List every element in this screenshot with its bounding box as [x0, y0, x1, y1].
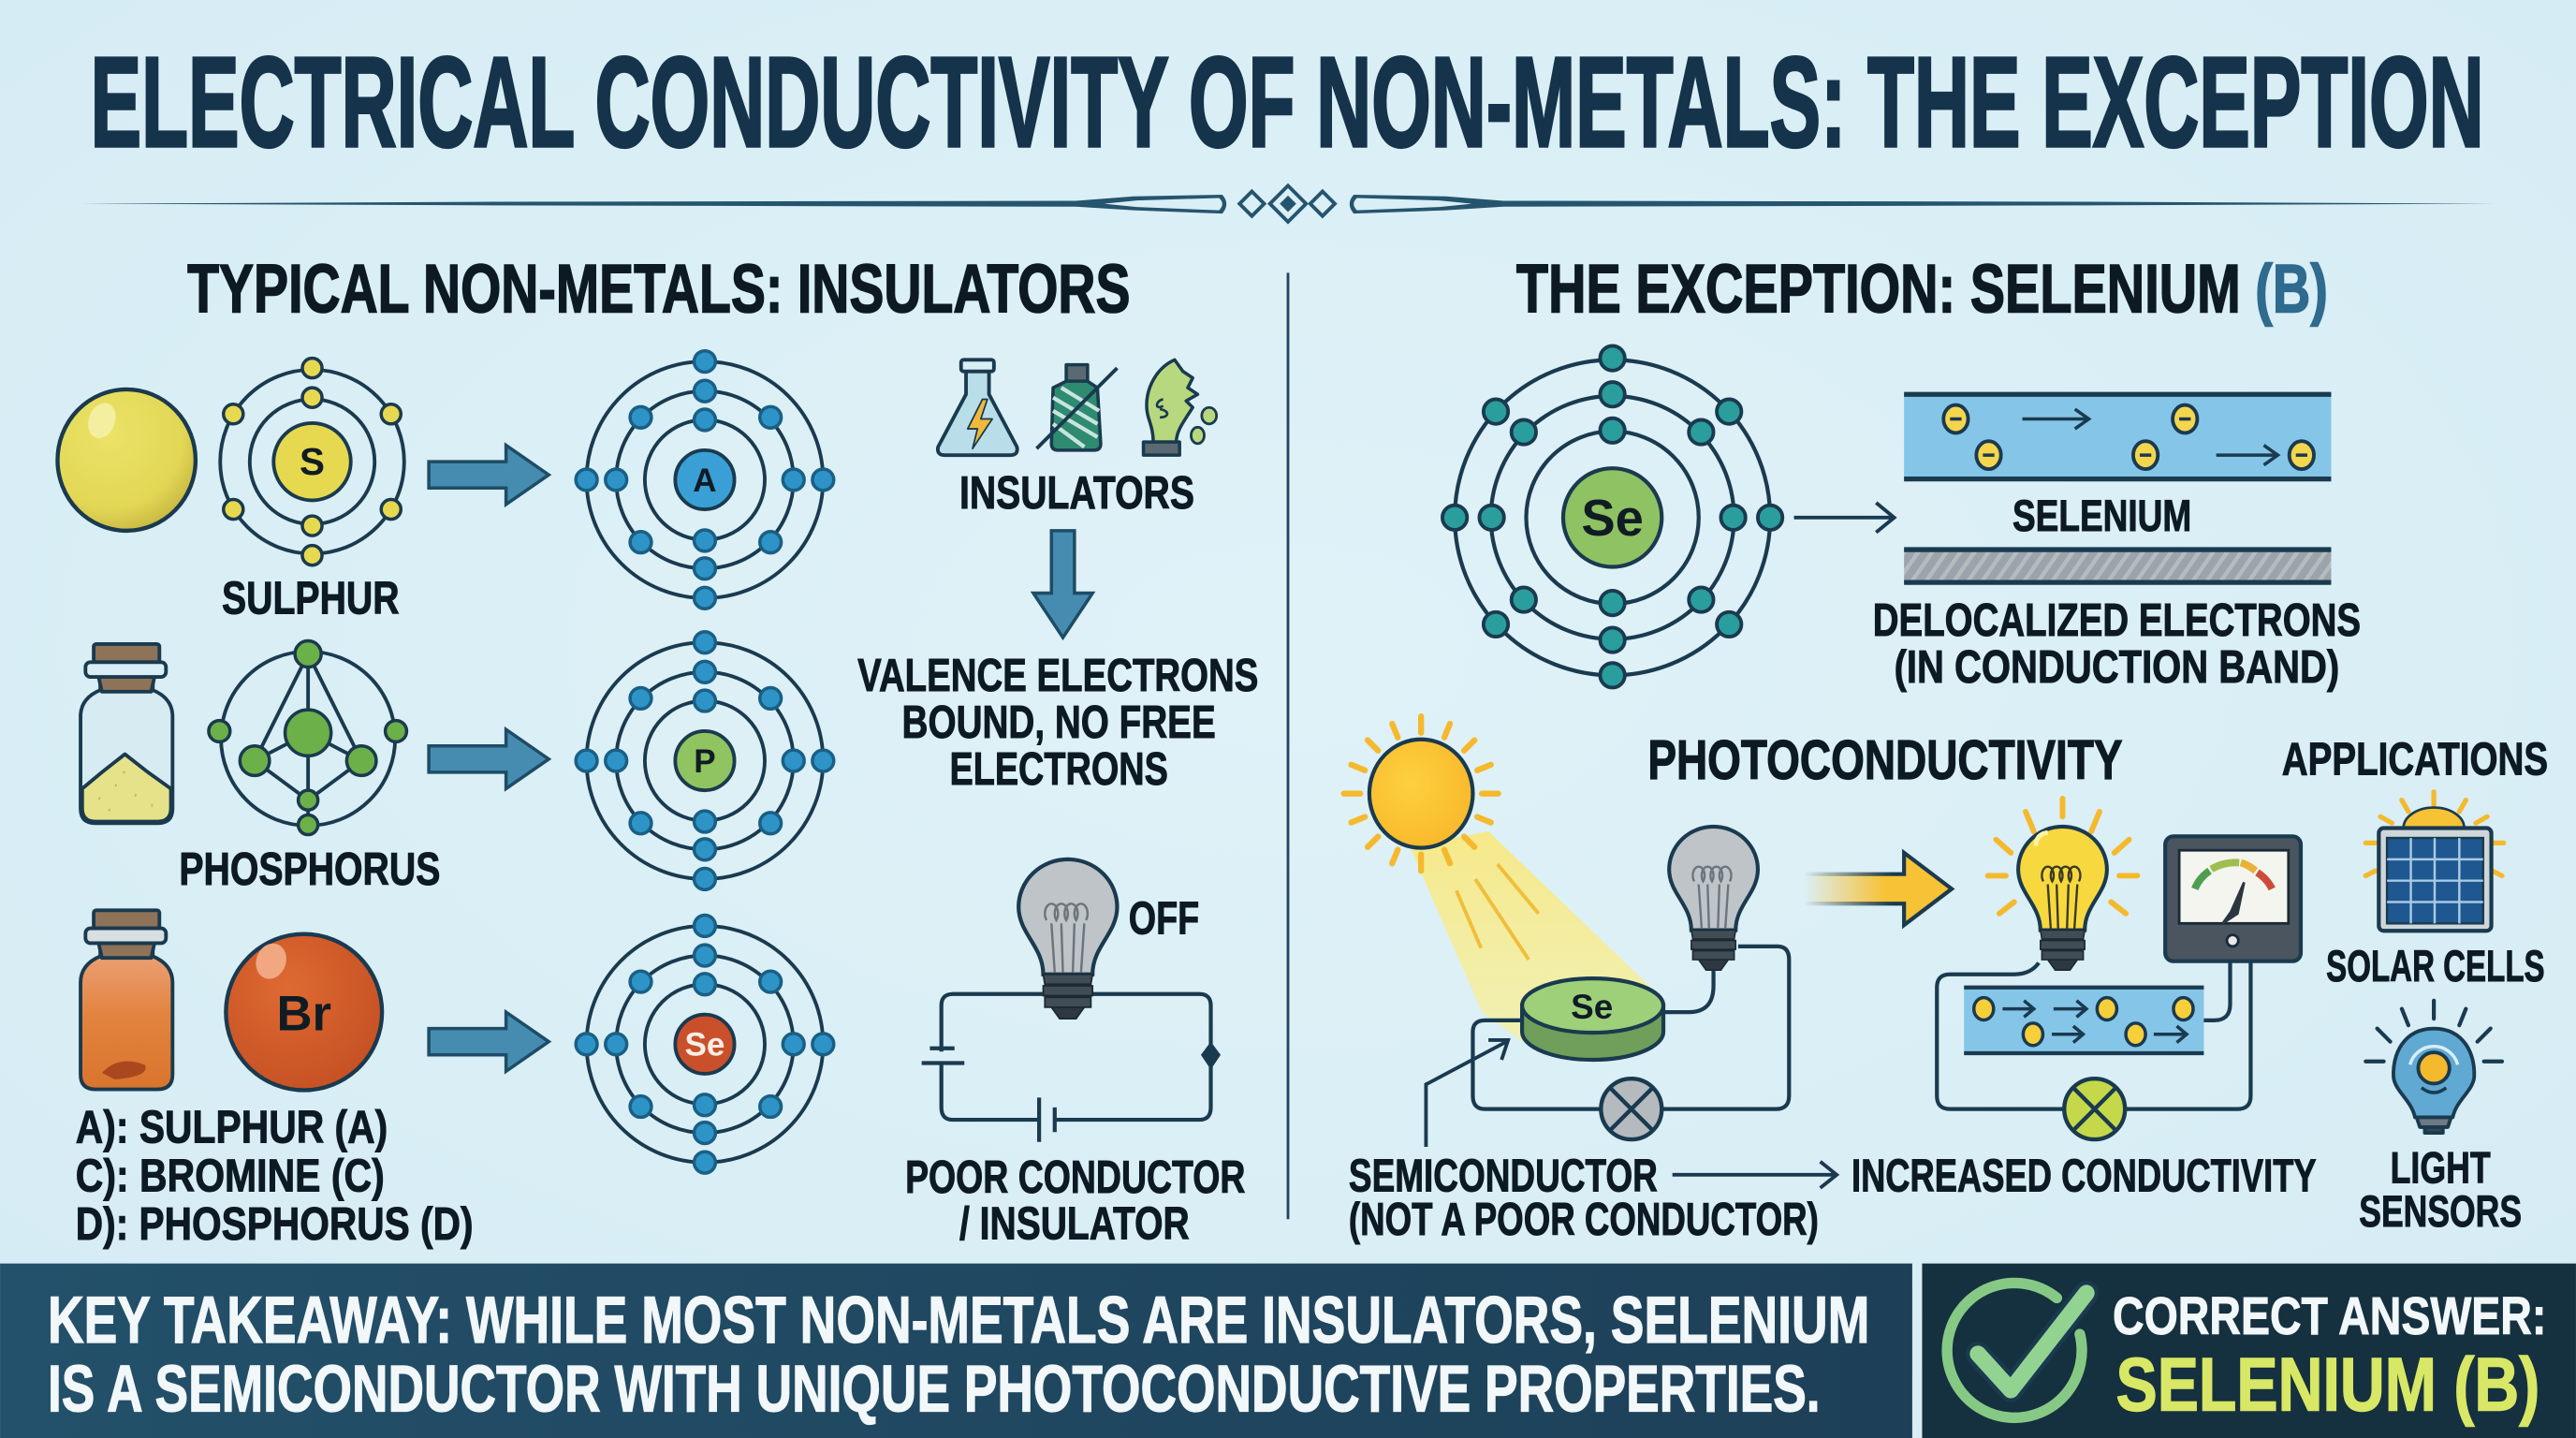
text: valence electrons: ELECTRONS: [949, 744, 1168, 795]
list: answer options: A): SULPHUR (A): [76, 1103, 388, 1153]
label: off: OFF: [1129, 894, 1199, 945]
arrow: phosphorus to atom P: [429, 729, 549, 788]
list: answer options: [76, 1103, 474, 1250]
icon: broken bulb: [1144, 360, 1217, 455]
list: answer options: C): BROMINE (C): [76, 1151, 385, 1201]
label: insulators: INSULATORS: [959, 468, 1194, 519]
atom: P: [576, 632, 834, 889]
icon: sulphur sphere: [57, 389, 196, 531]
text: takeaway: KEY TAKEAWAY: WHILE MOST NON-METALS ARE INSULATORS, SELENIUM: [48, 1283, 1869, 1357]
diagram: conduction band: [1904, 394, 2331, 479]
icon: grey lamp: [1601, 1078, 1661, 1139]
arrow: yellow transition: [1804, 853, 1952, 925]
circuit: open circuit with off bulb: [922, 859, 1221, 1142]
text: valence electrons: BOUND, NO FREE: [902, 697, 1216, 748]
icon: bromine sphere: Br: [276, 986, 331, 1041]
arrow: bromine to atom Se: [429, 1012, 549, 1071]
panel: correct answer: [1922, 1264, 2576, 1438]
light beam: [1410, 831, 1653, 1045]
label: poor conductor: / INSULATOR: [959, 1198, 1190, 1249]
text: takeaway: IS A SEMICONDUCTOR WITH UNIQUE PHOTOCONDUCTIVE PROPERTIES.: [48, 1352, 1821, 1426]
text: semiconductor: [1349, 1151, 1819, 1245]
icon: phosphorus vial: [80, 644, 172, 823]
label: poor conductor: [905, 1152, 1245, 1249]
heading: exception: THE EXCEPTION: SELENIUM (B): [1516, 249, 2328, 327]
arrow: sulphur to atom A: [429, 446, 549, 505]
panel: the exception selenium: [1344, 249, 2548, 1245]
icon: sulphur atom: S: [300, 440, 325, 483]
heading: typical non-metals: TYPICAL NON-METALS: INSULATORS: [187, 249, 1131, 327]
label: light sensors: SENSORS: [2359, 1187, 2522, 1237]
panel: typical non-metals: [57, 249, 1258, 1250]
icon: meter: [2165, 836, 2301, 961]
label: phosphorus: PHOSPHORUS: [179, 844, 440, 895]
icon: sun: [1344, 716, 1499, 871]
list: answer options: D): PHOSPHORUS (D): [76, 1199, 474, 1250]
label: poor conductor: POOR CONDUCTOR: [905, 1152, 1245, 1203]
icon: light sensor: [2365, 1001, 2502, 1133]
icon: flask: [938, 360, 1017, 455]
label: light sensors: LIGHT: [2391, 1144, 2491, 1194]
label: light sensors: [2359, 1144, 2522, 1237]
atom: selenium: [1442, 345, 1782, 687]
text: valence electrons: VALENCE ELECTRONS: [857, 651, 1258, 701]
section divider line: [1287, 272, 1289, 1219]
atom: selenium: Se: [1581, 490, 1644, 547]
diagram: valence band: [1904, 549, 2331, 583]
atom: P: P: [694, 743, 716, 780]
icon: bromine vial: [80, 910, 172, 1090]
text: semiconductor: SEMICONDUCTOR: [1349, 1151, 1658, 1201]
text: increased conductivity: INCREASED CONDUCTIVITY: [1852, 1151, 2317, 1201]
icon: selenium disc: [1522, 978, 1663, 1060]
label: selenium: SELENIUM: [2012, 492, 2191, 541]
heading: photoconductivity: PHOTOCONDUCTIVITY: [1647, 728, 2123, 791]
icon: solar cell: [2365, 792, 2504, 931]
text: semiconductor: (NOT A POOR CONDUCTOR): [1349, 1195, 1819, 1245]
circuit: lit photoconductor: [1937, 799, 2301, 1139]
diagram: charge flow band: [1964, 988, 2203, 1053]
icon: bromine sphere: [226, 934, 382, 1090]
title divider ornament: [82, 185, 2494, 222]
icon: sulphur atom: [220, 359, 404, 565]
atom: Se (red): Se: [684, 1027, 724, 1064]
atom: A: A: [693, 462, 717, 499]
icon: phosphorus molecule: [209, 640, 406, 835]
icon: crossed insulation spool: [1036, 365, 1117, 450]
text: delocalized electrons: (IN CONDUCTION BAND): [1895, 642, 2339, 693]
arrow: down: [1033, 531, 1092, 638]
text: delocalized electrons: [1873, 595, 2361, 693]
icon: lit bulb: [1988, 799, 2137, 970]
icon: selenium disc: Se: [1571, 988, 1613, 1026]
label: sulphur: SULPHUR: [222, 574, 400, 624]
circuit: dark photoconductor: [1472, 827, 1789, 1139]
atom: Se (red): [576, 916, 834, 1173]
icon: grey bulb: [1669, 827, 1758, 970]
text: delocalized electrons: DELOCALIZED ELECTRONS: [1873, 595, 2361, 646]
icon: off bulb: [1018, 859, 1117, 1019]
arrow: pointer to disc: [1426, 1040, 1508, 1147]
text: takeaway: [48, 1283, 1869, 1426]
panel: key takeaway: [0, 1264, 1912, 1438]
icon: check mark: [1947, 1283, 2086, 1417]
arrow: semiconductor to increased conductivity: [1673, 1162, 1837, 1188]
atom: A: [576, 351, 834, 609]
arrow: atom to band: [1794, 503, 1895, 533]
text: valence electrons: [857, 651, 1258, 795]
icon: lit lamp: [2064, 1078, 2125, 1139]
